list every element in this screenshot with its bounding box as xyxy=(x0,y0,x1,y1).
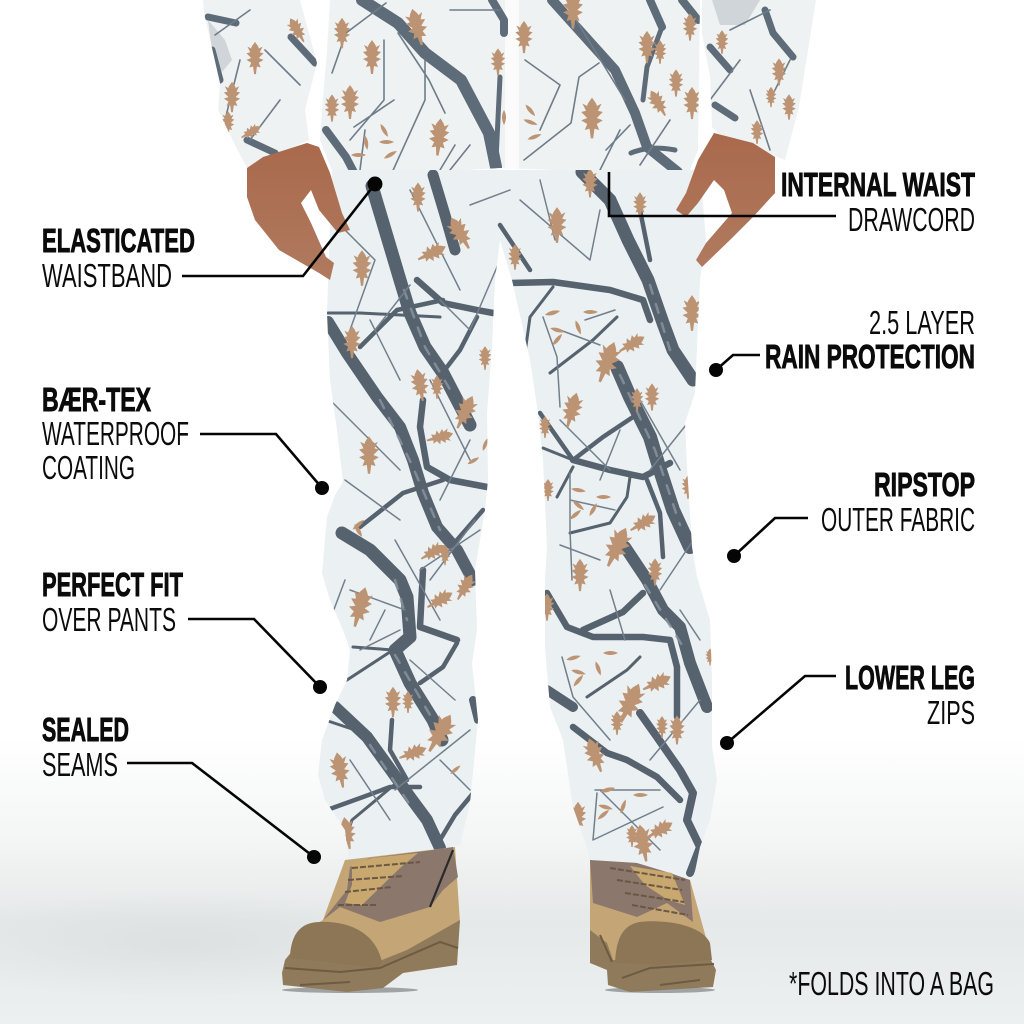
callout: ripstop outer fabric: RIPSTOP xyxy=(874,466,975,503)
small leaves xyxy=(545,310,560,316)
left boot xyxy=(282,847,460,993)
callout: perfect fit over pants xyxy=(42,566,327,694)
trousers xyxy=(310,165,725,890)
callout: baer-tex waterproof coating: COATING xyxy=(42,449,135,486)
floor shadow xyxy=(0,890,440,1000)
callout: internal waist drawcord xyxy=(609,166,975,238)
right hand xyxy=(676,133,775,267)
figure: model wearing camo trousers xyxy=(200,0,820,993)
callout: elasticated waistband: WAISTBAND xyxy=(42,257,172,294)
thick branches xyxy=(325,172,707,873)
oak leaves xyxy=(410,183,426,211)
left hand xyxy=(247,143,350,280)
callout: perfect fit over pants: OVER PANTS xyxy=(42,601,176,638)
callout: lower leg zips: ZIPS xyxy=(927,694,975,731)
callout: baer-tex waterproof coating: WATERPROOF xyxy=(42,415,189,452)
callout: lower leg zips xyxy=(720,659,975,750)
thin twigs xyxy=(330,180,700,850)
callout: ripstop outer fabric xyxy=(727,466,975,563)
callout: elasticated waistband xyxy=(42,176,382,294)
callout: elasticated waistband: ELASTICATED xyxy=(42,222,195,259)
callout: baer-tex waterproof coating xyxy=(42,381,329,495)
callout: baer-tex waterproof coating: BÆR-TEX xyxy=(42,381,151,418)
callout: sealed seams xyxy=(42,711,321,864)
right boot xyxy=(590,860,716,993)
jacket and sleeves xyxy=(200,0,820,185)
callout: perfect fit over pants: PERFECT FIT xyxy=(42,566,183,603)
callout: sealed seams: SEAMS xyxy=(42,746,118,783)
bark texture xyxy=(370,285,685,805)
callout: 2.5 layer rain protection xyxy=(709,304,975,377)
callout: sealed seams: SEALED xyxy=(42,711,129,748)
